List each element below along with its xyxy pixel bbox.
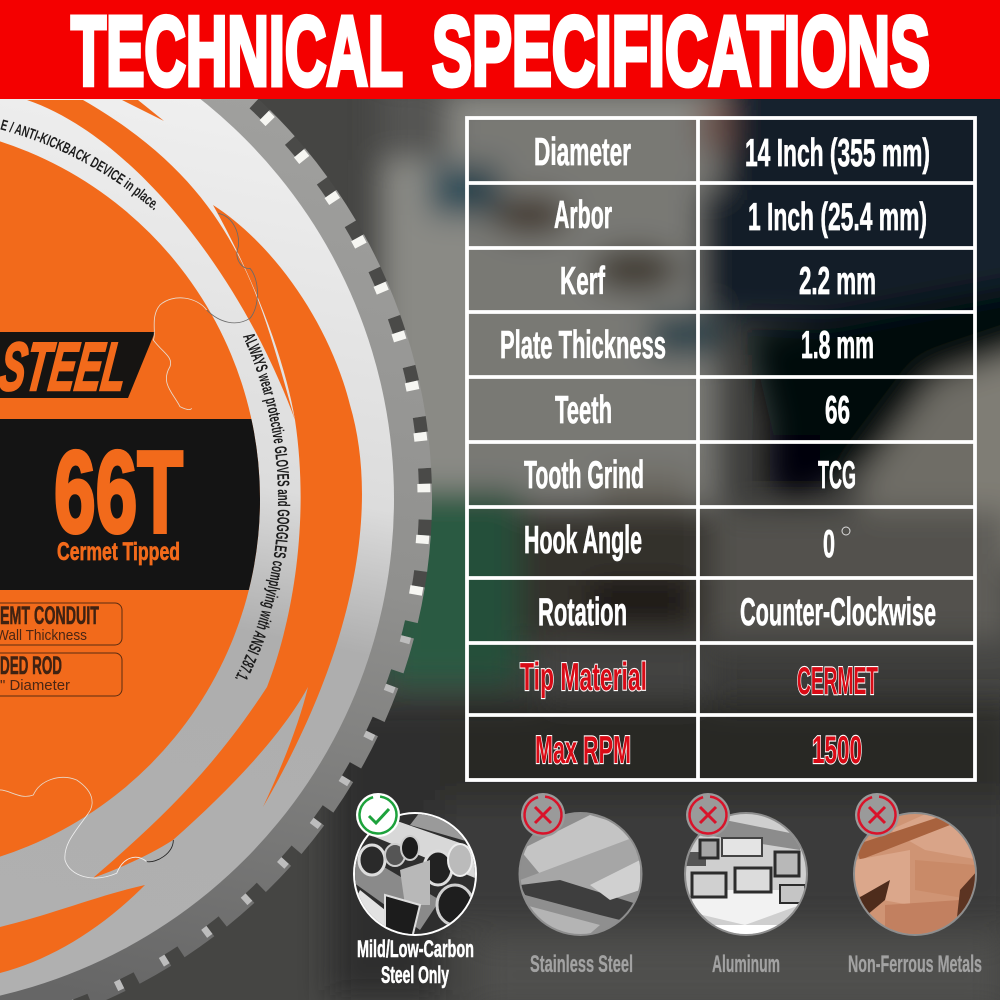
EMT conduit box: EMT CONDUIT (0, 602, 99, 630)
specification table: TCG (818, 454, 856, 497)
66T: 66T (54, 427, 183, 557)
specification table (467, 118, 975, 781)
material: aluminum (682, 789, 809, 978)
threaded rod box: " Diameter (0, 677, 70, 694)
icon: green check badge (352, 789, 404, 841)
row: max rpm (535, 729, 862, 772)
STEEL banner (0, 329, 155, 405)
icon: aluminum extrusions (684, 812, 809, 937)
row: diameter: Diameter (534, 131, 631, 174)
icon: red cross badge (682, 789, 734, 841)
row: arbor: Arbor (554, 194, 612, 237)
row: hook angle: Hook Angle (524, 519, 642, 562)
row: hook angle (524, 519, 850, 566)
tooth tips, lower (72, 635, 411, 1000)
gullet shadows (369, 266, 432, 588)
material: non-ferrous metals (848, 789, 982, 978)
blade grey rim (0, 0, 419, 1000)
STEEL banner: STEEL (0, 329, 132, 405)
rim warning text, top: E / ANTI-KICKBACK DEVICE in place. (0, 120, 156, 210)
row: kerf: Kerf (560, 260, 606, 303)
icon: red cross badge (517, 789, 569, 841)
material: mild steel (350, 789, 480, 989)
row: rotation (538, 591, 936, 634)
row: plate thickness: 1.8 mm (801, 324, 874, 367)
specification table: CERMET (797, 660, 878, 703)
row: arbor (554, 194, 927, 239)
icon: red cross badge (851, 789, 903, 841)
table grid (467, 118, 975, 780)
Cermet Tipped: Cermet Tipped (57, 538, 180, 566)
orange lower crescent (0, 885, 145, 973)
orange top sliver (122, 100, 164, 121)
circular saw blade (0, 99, 432, 1000)
orange inner crescent (27, 100, 295, 420)
black band (0, 419, 260, 590)
row: hook angle: 0 (823, 523, 835, 566)
label: Stainless Steel (530, 951, 633, 978)
EMT conduit box (0, 602, 122, 645)
threaded rod box (0, 652, 122, 696)
row: kerf (560, 260, 876, 303)
table cell shading (467, 119, 975, 781)
row: kerf: 2.2 mm (799, 260, 876, 303)
row: tooth grind: Tooth Grind (524, 454, 644, 497)
label: Steel Only (381, 962, 449, 989)
row: diameter (534, 131, 930, 175)
title banner (0, 0, 1000, 106)
row: teeth: 66 (825, 389, 850, 432)
row: plate thickness: Plate Thickness (500, 324, 666, 367)
loose wire, upper (153, 213, 257, 410)
icon: copper plates (853, 812, 980, 937)
label (357, 936, 474, 989)
row: max rpm: 1500 (812, 729, 862, 772)
row: rotation: Rotation (538, 591, 627, 634)
row: tip material: Tip Material (520, 656, 647, 699)
icon: steel tubes (350, 810, 480, 940)
saw teeth (0, 0, 425, 1000)
rim warning text, side: ALWAYS wear protective GLOVES and GOGGLES complying with ANSI Z87.1. (235, 334, 290, 680)
label: Mild/Low-Carbon (357, 936, 474, 963)
tooth tips, upper (260, 110, 430, 596)
loose wire, lower (0, 777, 173, 878)
row: max rpm: Max RPM (535, 729, 631, 772)
row: tooth grind (524, 454, 856, 497)
material: stainless steel (517, 789, 643, 978)
row: teeth: Teeth (555, 389, 612, 432)
row: teeth (555, 389, 850, 432)
icon: steel plates (518, 812, 643, 938)
orange disc (0, 123, 260, 875)
row: tip material (520, 656, 878, 703)
threaded rod box: DED ROD (0, 652, 62, 680)
label: Aluminum (712, 951, 780, 978)
orange outer wing (93, 205, 362, 878)
silver body (0, 0, 394, 1000)
